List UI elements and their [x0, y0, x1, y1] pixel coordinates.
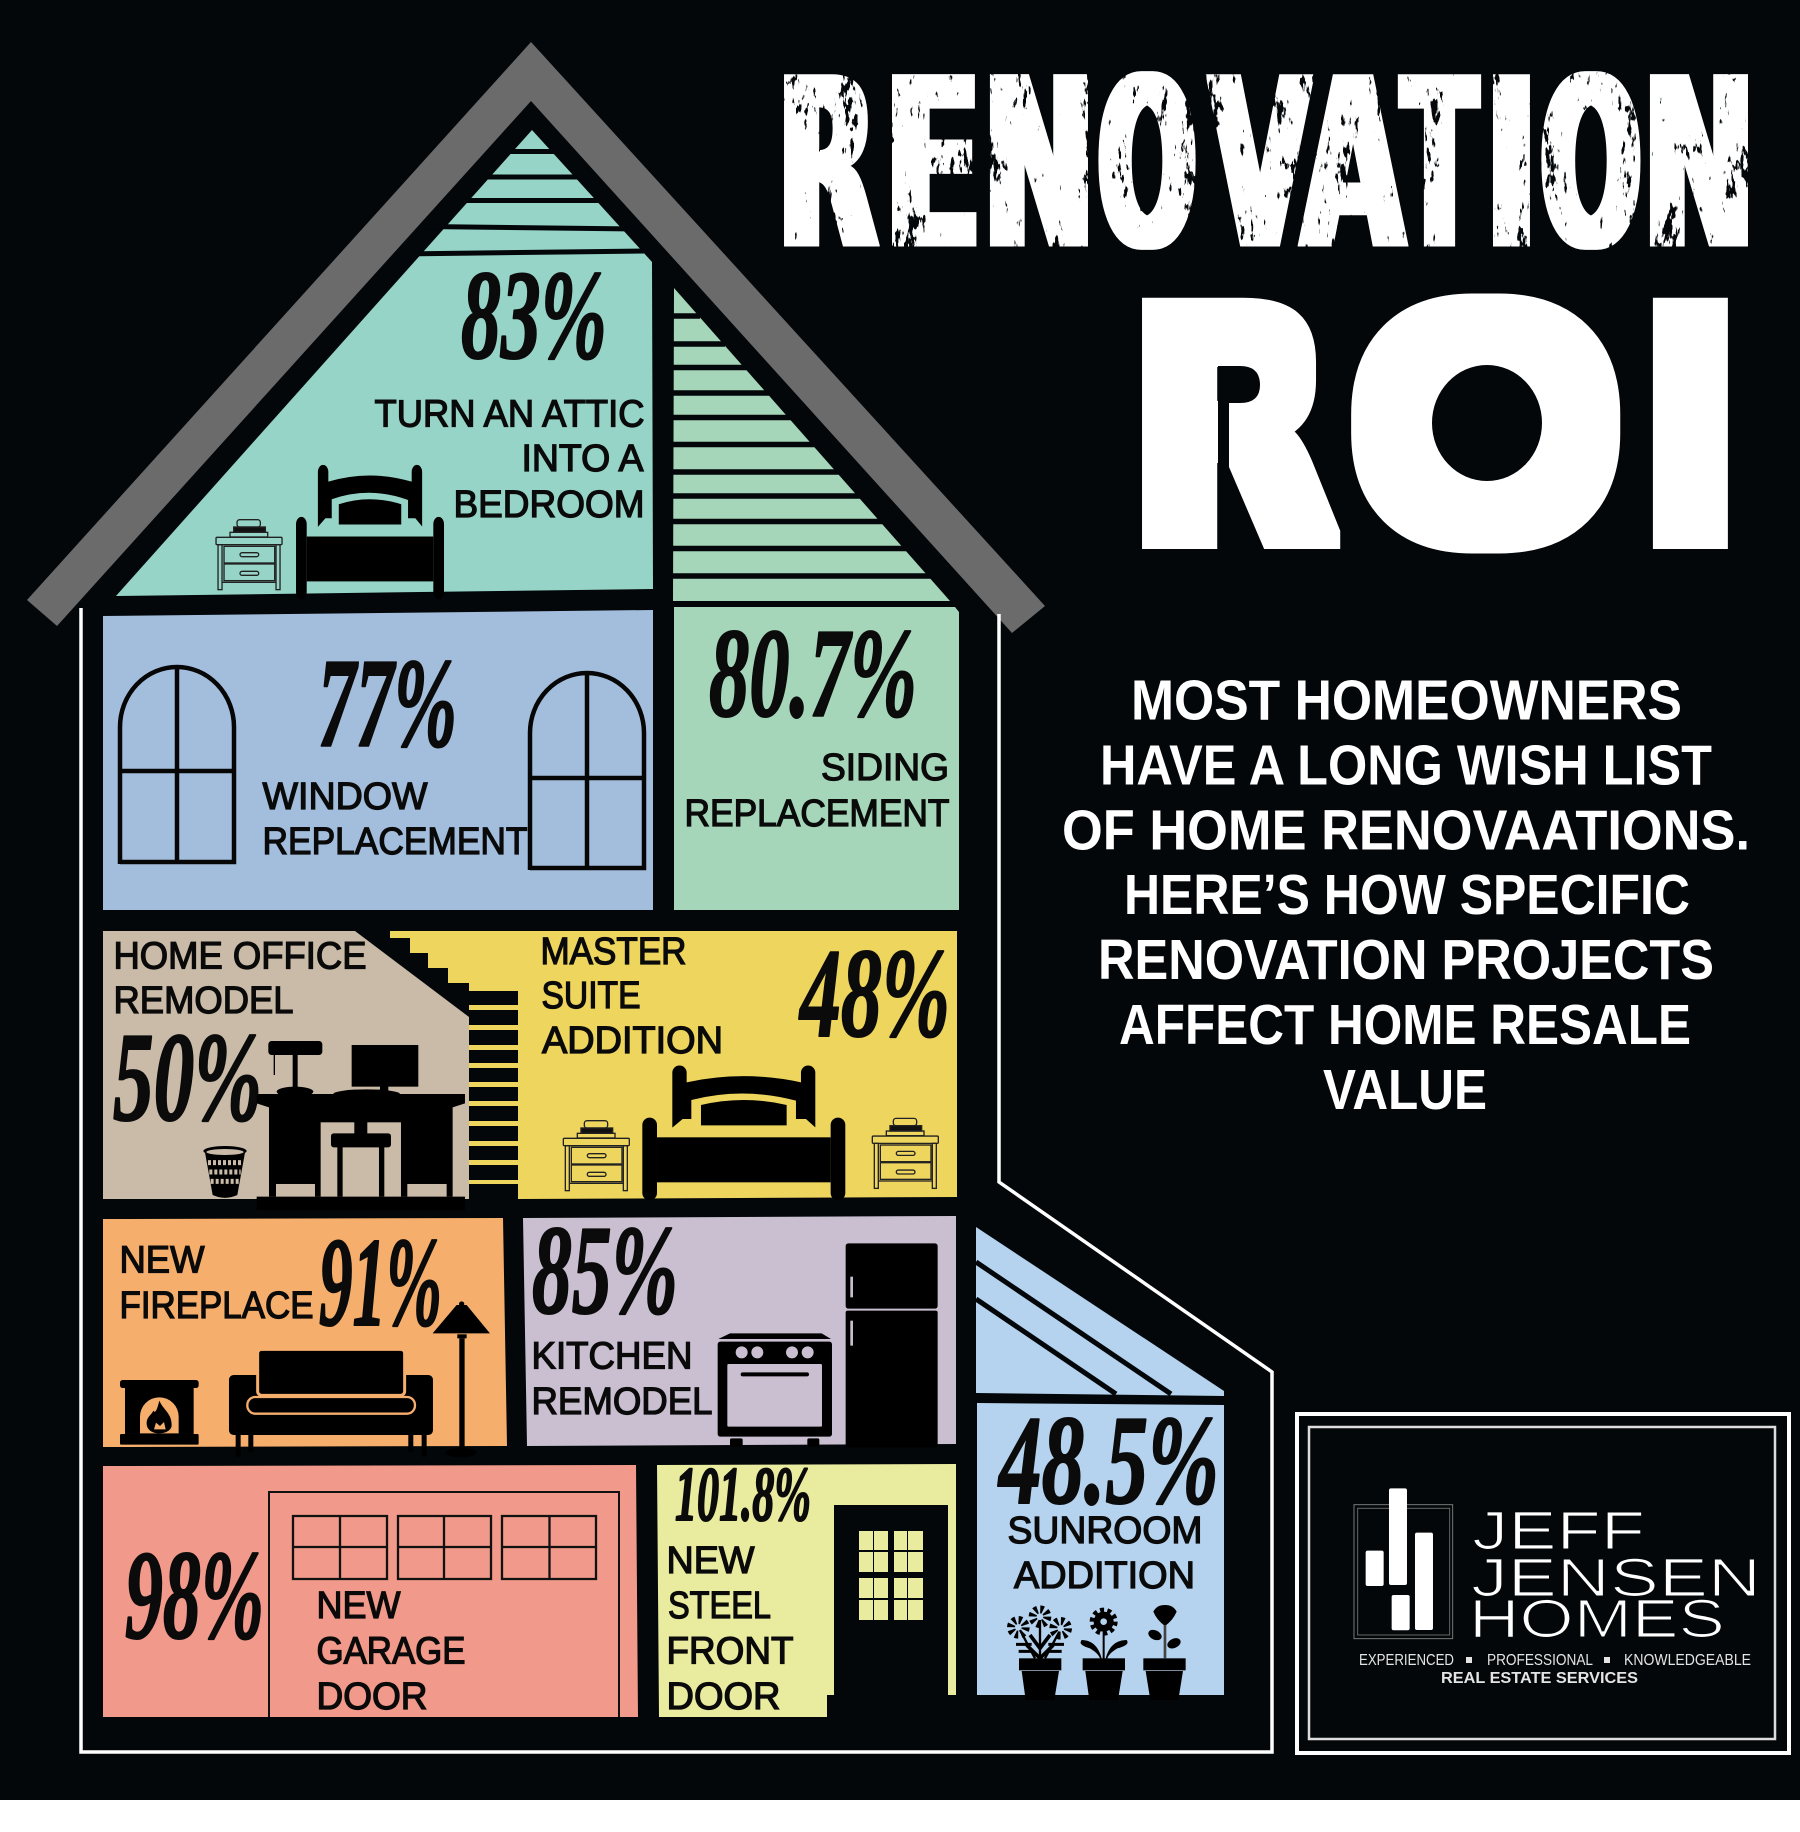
icon: fireplace: [120, 1380, 199, 1445]
label: siding replacement: REPLACEMENT: [684, 793, 950, 835]
label: new garage door: GARAGE: [316, 1630, 466, 1672]
label: new steel front door: DOOR: [666, 1676, 780, 1718]
icon: desk with lamp and monitor: [257, 1041, 465, 1210]
icon: left nightstand: [563, 1121, 629, 1191]
label: window replacement: REPLACEMENT: [262, 821, 528, 863]
label: siding replacement: [684, 747, 950, 835]
logo panel: jeff jensen homes: [1297, 1414, 1789, 1753]
title: renovation: R: [778, 28, 877, 302]
title: renovation: A: [1302, 28, 1404, 302]
percent: 91%: 91%: [319, 1213, 442, 1353]
percent: 77%: 77%: [318, 634, 457, 774]
roi letter counters: [1212, 345, 1553, 551]
title: renovation: I: [1486, 29, 1537, 302]
label: master suite addition: [540, 931, 723, 1062]
label: window replacement: [262, 776, 528, 863]
icon: bed: [642, 1065, 845, 1200]
percent: 48.5%: 48.5%: [998, 1391, 1219, 1531]
icon: stove: [718, 1333, 832, 1447]
title: roi: I: [1642, 243, 1739, 616]
label: new garage door: NEW: [316, 1585, 401, 1627]
icon: right nightstand: [872, 1118, 938, 1188]
percent: 50%: 50%: [113, 1008, 262, 1148]
intro text block: MOST HOMEOWNERS: [1131, 668, 1682, 732]
label: home office remodel: HOME OFFICE: [114, 936, 366, 978]
intro text block: RENOVATION PROJECTS: [1098, 928, 1714, 992]
panel: kitchen remodel: [523, 1201, 956, 1447]
icon: floor lamp: [433, 1301, 490, 1457]
intro text block: OF HOME RENOVAATIONS.: [1062, 798, 1750, 862]
label: sunroom addition: ADDITION: [1014, 1555, 1195, 1597]
label: window replacement: WINDOW: [262, 776, 428, 818]
intro text block: HAVE A LONG WISH LIST: [1100, 733, 1712, 797]
label: new steel front door: [666, 1540, 794, 1718]
logo tagline: [1359, 1652, 1751, 1687]
intro text block: VALUE: [1323, 1058, 1487, 1122]
label: new steel front door: FRONT: [666, 1630, 794, 1672]
title: roi: O: [1348, 243, 1624, 616]
panel: master suite addition: [390, 924, 957, 1200]
house outline: [81, 608, 1272, 1752]
label: master suite addition: ADDITION: [542, 1020, 723, 1062]
icon: refrigerator: [846, 1243, 938, 1447]
percent: 101.8%: 101.8%: [675, 1451, 811, 1537]
icon: nightstand: [216, 520, 282, 590]
icon: left window: [120, 667, 234, 864]
icon: sofa: [229, 1349, 433, 1457]
panel: siding replacement: [674, 604, 959, 910]
percent: 83%: 83%: [461, 246, 607, 386]
roof: [27, 42, 1045, 633]
icon: wastebasket: [203, 1146, 247, 1198]
panel: sunroom glass roof: [976, 1227, 1224, 1396]
title: renovation: V: [1210, 27, 1310, 302]
panel: window replacement: [103, 610, 653, 910]
panel: new fireplace: [103, 1213, 507, 1457]
percent: 48%: 48%: [799, 924, 950, 1064]
title: roi: R: [1131, 243, 1333, 616]
logo wordmark: JENSEN: [1471, 1548, 1761, 1608]
icon: garage windows: [293, 1516, 596, 1579]
title: renovation: O: [1098, 27, 1196, 302]
logo tagline: REAL ESTATE SERVICES: [1441, 1670, 1638, 1687]
label: turn an attic into a bedroom: INTO A: [522, 438, 644, 480]
label: turn an attic into a bedroom: [374, 394, 644, 526]
label: new fireplace: FIREPLACE: [120, 1285, 314, 1327]
icon: garage door: [269, 1492, 619, 1717]
logo tagline: EXPERIENCED: [1359, 1652, 1454, 1669]
logo wordmark: JEFF: [1472, 1501, 1645, 1561]
intro text block: AFFECT HOME RESALE: [1119, 993, 1691, 1057]
label: new fireplace: NEW: [120, 1240, 205, 1282]
intro text block: HERE’S HOW SPECIFIC: [1124, 863, 1690, 927]
panel: new steel front door: [657, 1451, 956, 1718]
icon: bed: [296, 465, 444, 599]
percent: 98%: 98%: [125, 1526, 264, 1666]
title: roi: [1131, 243, 1739, 616]
percent: 85%: 85%: [532, 1201, 678, 1341]
label: siding replacement: SIDING: [821, 747, 949, 789]
panel: new garage door: [103, 1465, 638, 1718]
logo wordmark: [1469, 1501, 1761, 1649]
label: home office remodel: [114, 936, 366, 1022]
label: kitchen remodel: [532, 1336, 712, 1423]
title: renovation: N: [983, 29, 1095, 303]
label: kitchen remodel: KITCHEN: [532, 1336, 692, 1378]
label: new garage door: [316, 1585, 466, 1718]
icon: door: [834, 1505, 948, 1697]
label: sunroom addition: [1008, 1510, 1202, 1597]
icon: right window: [530, 673, 644, 870]
stair treads: [469, 991, 518, 1200]
label: turn an attic into a bedroom: TURN AN ATTIC: [374, 394, 644, 436]
label: new fireplace: [120, 1240, 314, 1327]
title: renovation: E: [884, 28, 981, 302]
icon: potted flowers: [1011, 1605, 1186, 1700]
intro text block: [1062, 668, 1750, 1122]
label: new garage door: DOOR: [316, 1676, 428, 1718]
panel: home office remodel: [103, 931, 469, 1210]
panel: attic bedroom: [116, 130, 653, 599]
logo tagline: PROFESSIONAL: [1487, 1652, 1593, 1669]
title: renovation: N: [1643, 29, 1755, 303]
title: renovation: T: [1403, 29, 1476, 303]
logo tagline: KNOWLEDGEABLE: [1624, 1652, 1751, 1669]
title: renovation: [778, 27, 1755, 303]
label: new steel front door: STEEL: [668, 1585, 771, 1627]
label: sunroom addition: SUNROOM: [1008, 1510, 1202, 1552]
label: new steel front door: NEW: [666, 1540, 755, 1582]
label: kitchen remodel: REMODEL: [532, 1381, 712, 1423]
label: master suite addition: SUITE: [542, 975, 640, 1017]
logo wordmark: HOMES: [1469, 1589, 1725, 1649]
icon: logo bars: [1354, 1488, 1453, 1639]
percent: 80.7%: 80.7%: [709, 604, 917, 744]
panel: siding gable: [673, 288, 960, 604]
panel: sunroom addition: [977, 1391, 1224, 1700]
label: master suite addition: MASTER: [540, 931, 686, 973]
label: home office remodel: REMODEL: [114, 980, 294, 1022]
title: renovation: O: [1541, 28, 1641, 302]
label: turn an attic into a bedroom: BEDROOM: [454, 484, 644, 526]
